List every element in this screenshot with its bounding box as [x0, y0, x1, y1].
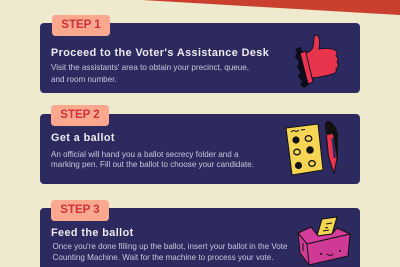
step 3 tab: STEP 3 — [60, 204, 100, 216]
step 2 tab: STEP 2 — [60, 108, 100, 120]
step 1 tab: STEP 1 — [61, 19, 101, 31]
panel: step 1 — [40, 22, 360, 93]
step 2 heading: Get a ballot — [51, 132, 115, 144]
step 3 text — [52, 242, 288, 262]
box — [298, 227, 350, 244]
step 2 tab — [51, 104, 109, 126]
step 1 text: and room number. — [51, 75, 117, 84]
panel: step 3 — [40, 208, 360, 267]
step 1 heading: Proceed to the Voter's Assistance Desk — [51, 46, 269, 58]
red corner wedge — [142, 0, 400, 15]
step 2 text — [51, 150, 254, 169]
panel: step 2 — [40, 114, 360, 184]
paper — [317, 217, 337, 236]
step 1 text — [51, 63, 249, 84]
step 3 text: Counting Machine. Wait for the machine to process your vote. — [52, 252, 274, 262]
step 1 text: Visit the assistants' area to obtain your precinct, queue, — [51, 63, 249, 72]
step 1 tab — [52, 15, 110, 36]
step 3 text: Once you're done filling up the ballot, insert your ballot in the Vote — [52, 242, 288, 251]
step 2 text: marking pen. Fill out the ballot to choose your candidate. — [51, 160, 254, 169]
step 3 heading: Feed the ballot — [51, 226, 134, 238]
step 3 tab — [51, 200, 109, 221]
ballot sheet — [286, 124, 323, 175]
step 2 text: An official will hand you a ballot secrecy folder and a — [51, 150, 238, 159]
pen — [325, 121, 338, 173]
